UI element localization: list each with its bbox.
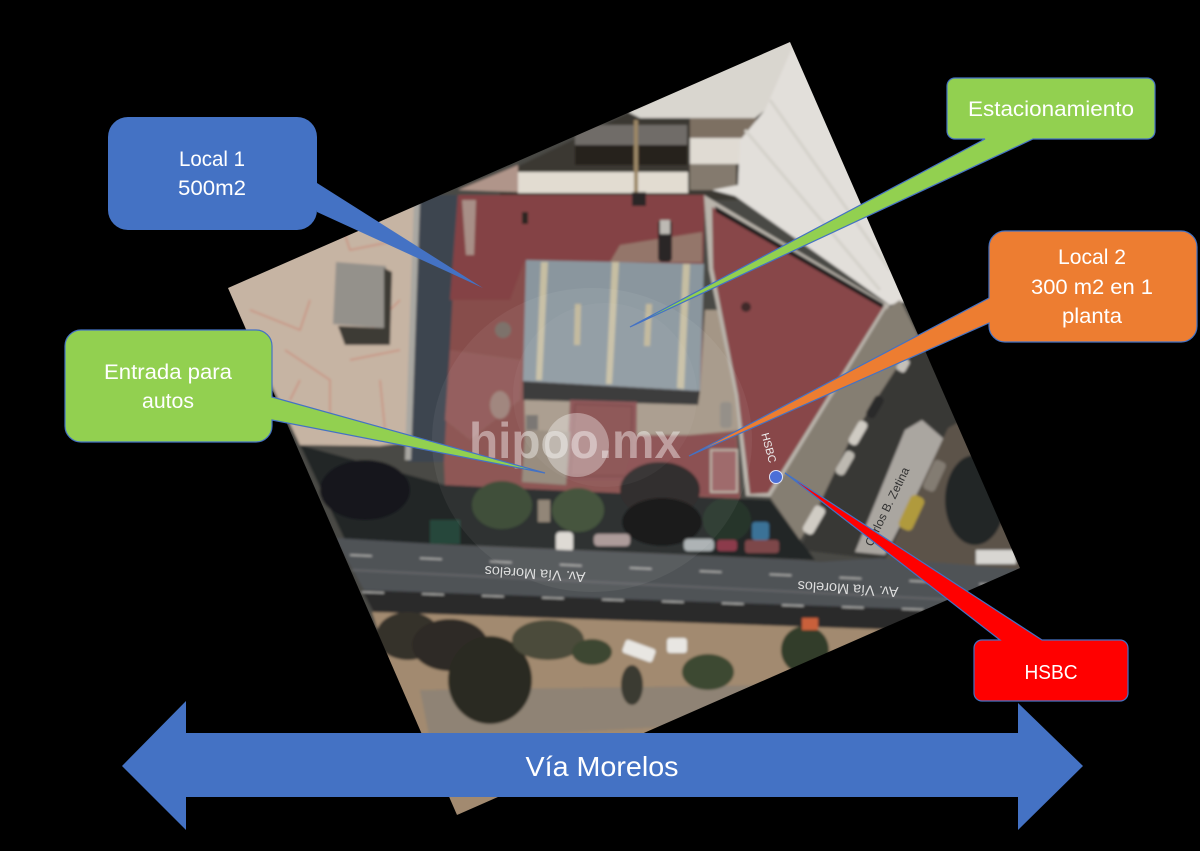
- label: Entrada para autos: Entrada para: [104, 361, 232, 384]
- tan median with trees: [370, 610, 884, 815]
- label: Vía Morelos: Vía Morelos: [526, 751, 678, 782]
- north buildings: [458, 30, 912, 305]
- sidewalk, parked cars strip: [770, 300, 918, 540]
- callout: Local 2: [689, 231, 1197, 456]
- map pin: HSBC: [770, 470, 782, 484]
- double arrow: Vía Morelos: [122, 701, 1083, 830]
- dark corrugated strip: [412, 196, 456, 462]
- Avenida Vía Morelos road: [335, 538, 1030, 635]
- callout: Estacionamiento: [630, 78, 1155, 327]
- aerial photo of the property: [200, 30, 1050, 830]
- triangular red roof: [704, 195, 890, 497]
- callout: Local 1: [108, 117, 483, 288]
- callout: Entrada para autos: [65, 330, 545, 473]
- main red roof: [442, 260, 742, 500]
- watermark: hipoo.mx: hipoo.mx: [469, 413, 681, 469]
- grey metal roof: [523, 260, 704, 391]
- label: Estacionamiento: Estacionamiento: [968, 98, 1134, 121]
- neighbouring cracked roof: [228, 206, 416, 448]
- label: HSBC: HSBC: [1024, 662, 1078, 684]
- rear yard: [522, 310, 745, 497]
- label: Local 2 300 m2 en 1 planta: 300 m2 en 1: [1031, 276, 1153, 299]
- watermark circles: [432, 288, 752, 592]
- Carlos B. Zetina median: [855, 420, 945, 555]
- callout: HSBC: [785, 473, 1128, 701]
- label: Local 1 500m2: 500m2: [178, 177, 246, 200]
- map label: HSBC: HSBC: [758, 432, 778, 464]
- parked cars on the avenue: [556, 522, 779, 553]
- road label: Carlos B. Zetina: Carlos B. Zetina: [862, 465, 913, 548]
- road label: Av. Vía Morelos east: Av. Vía Morelos: [797, 577, 899, 599]
- road label: Av. Vía Morelos: Av. Vía Morelos: [484, 562, 586, 584]
- front trees and shadow: [300, 445, 815, 560]
- east lot: [886, 422, 1020, 569]
- label: Local 2 300 m2 en 1 planta: Local 2: [1058, 246, 1126, 269]
- label: Local 1 500m2: Local 1: [179, 148, 245, 171]
- label: Local 2 300 m2 en 1 planta: planta: [1062, 305, 1122, 328]
- label: Entrada para autos: autos: [142, 390, 194, 413]
